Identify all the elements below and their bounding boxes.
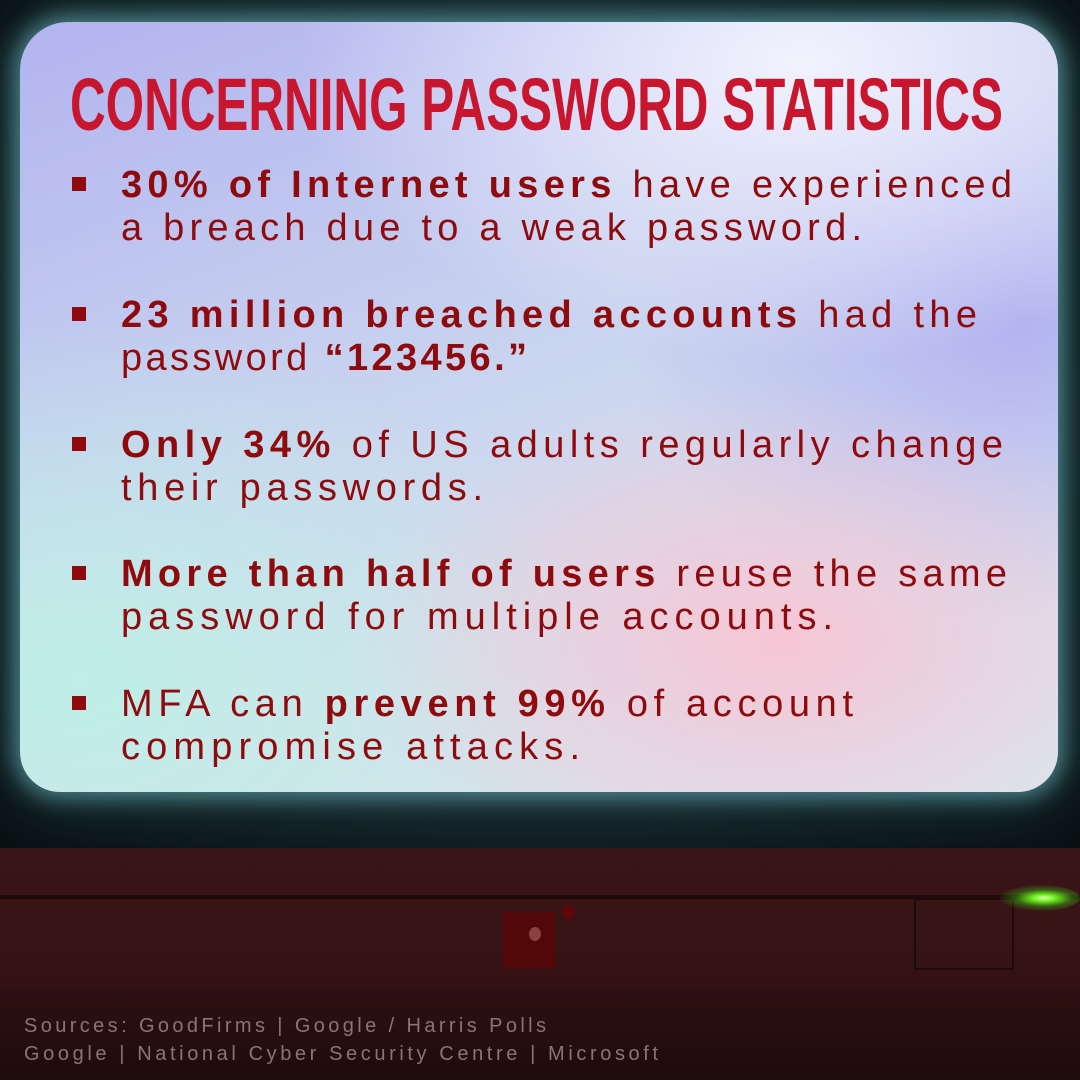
stat 1: 30% of Internet users have experienced [121,164,1012,206]
icon: green LED [1000,885,1080,911]
sources: Sources: GoodFirms | Google / Harris Polls [24,1015,546,1037]
sources [24,1015,658,1065]
stat 1: a breach due to a weak password. [121,207,862,249]
stat 2: 23 million breached accounts had the [121,294,977,336]
monitor screen [20,22,1058,792]
stat 5: MFA can prevent 99% of account [121,683,853,725]
stat 2: password “123456.” [121,337,527,379]
sources: Google | National Cyber Security Centre | Microsoft [24,1043,658,1065]
stat 3: their passwords. [121,467,483,509]
icon: red dot [562,905,575,919]
icon: power button [503,912,555,968]
stat list [72,164,1012,768]
stat 4: More than half of users reuse the same [121,553,1007,595]
drive slot [914,898,1014,970]
stat 5: compromise attacks. [121,726,580,768]
stat 4 [72,553,1007,638]
stat 3: Only 34% of US adults regularly change [121,424,1003,466]
stat 4: password for multiple accounts. [121,596,833,638]
stat 1 [72,164,1012,249]
monitor base panel [0,848,1080,1080]
stat 3 [72,424,1003,509]
stat 5 [72,683,853,768]
stat 2 [72,294,977,379]
